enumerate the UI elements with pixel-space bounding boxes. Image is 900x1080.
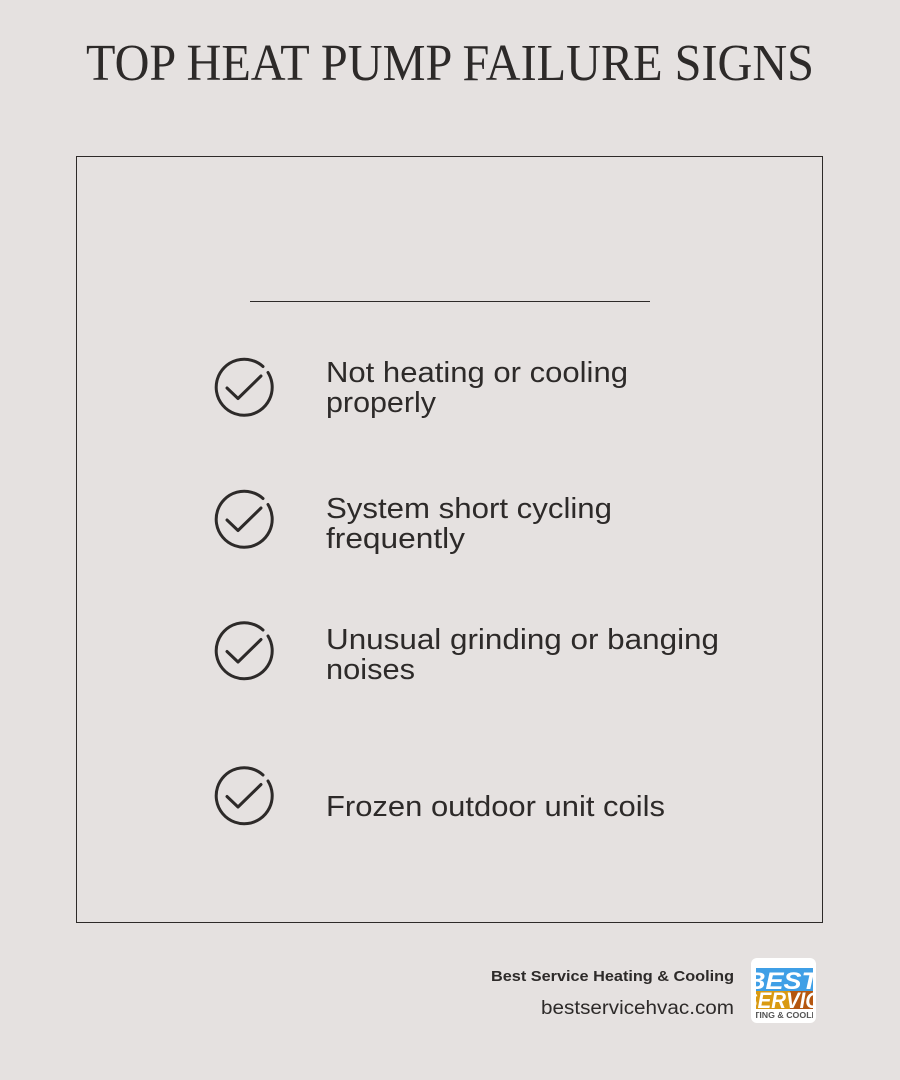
item 1: not heating or cooling [216,357,628,419]
company logo: TING & COOLI [754,1011,814,1020]
item 4: frozen coils: Frozen outdoor unit coils [326,791,665,823]
panel: failure signs [76,156,822,922]
company logo: BEST [746,968,821,995]
infographic canvas [76,46,823,1023]
company logo [751,958,816,1023]
item 2: short cycling: System short cycling [326,493,612,525]
item 1: not heating or cooling: properly [326,387,437,419]
item 3: unusual noises [216,623,719,686]
item 3: unusual noises: noises [326,654,415,686]
item 4: frozen coils [216,768,665,824]
panel divider [250,301,650,302]
item 2: short cycling [216,491,612,555]
item 1: not heating or cooling: Not heating or cooling [326,357,628,389]
title: TOP HEAT PUMP FAILURE SIGNS [86,35,814,92]
footer: company name: Best Service Heating & Cooling [491,968,734,985]
item 3: unusual noises: Unusual grinding or banging [326,624,719,656]
company logo: SERVIC [744,988,821,1013]
item 2: short cycling: frequently [326,523,466,555]
footer: website: bestservicehvac.com [541,998,734,1019]
